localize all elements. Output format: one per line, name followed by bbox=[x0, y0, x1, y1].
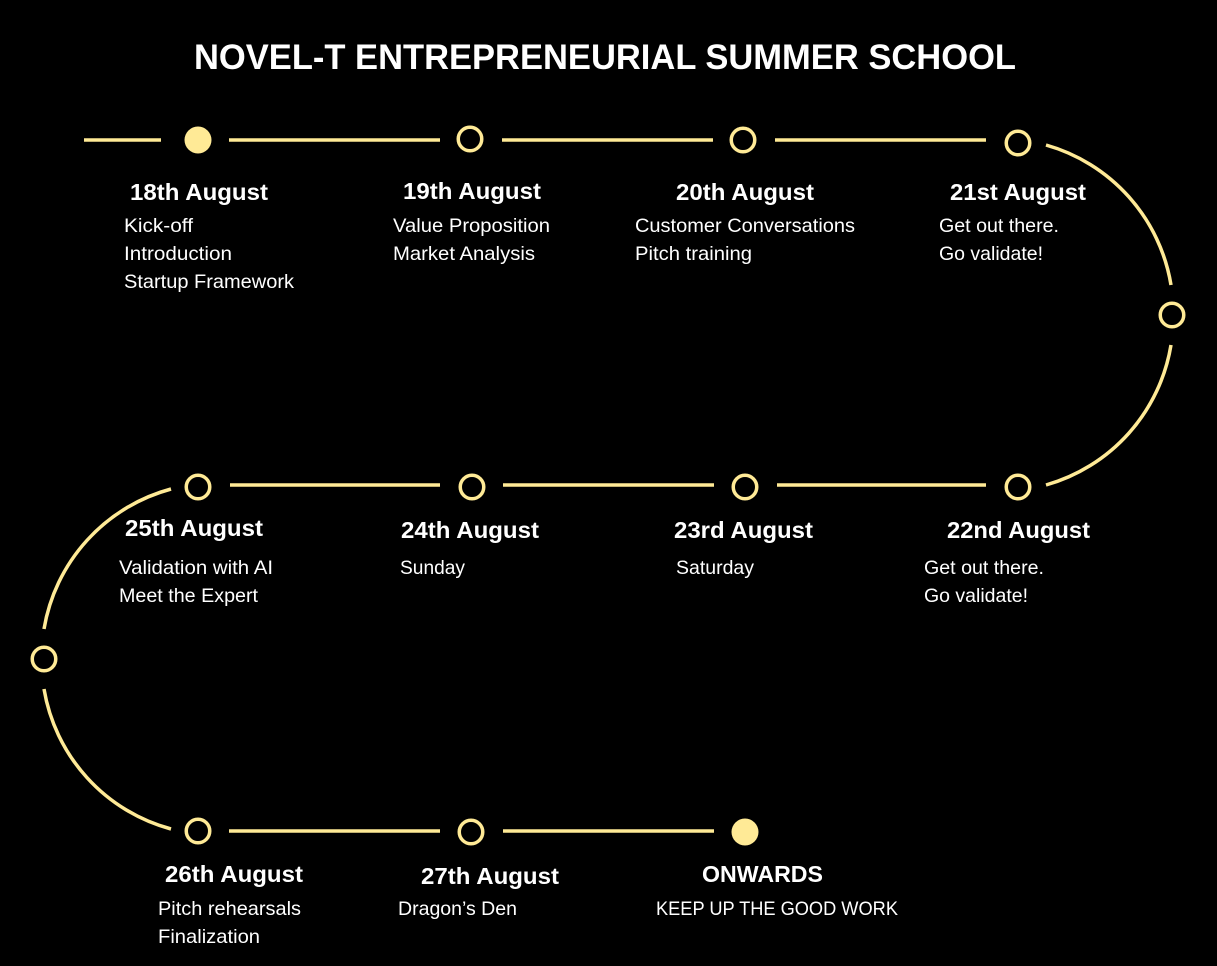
node: left curve bbox=[32, 647, 56, 671]
milestone: 25th August: 25th August bbox=[125, 515, 263, 541]
milestone: 20th August: 20th August bbox=[676, 179, 814, 205]
milestone: 18th August: Startup Framework bbox=[124, 271, 294, 293]
milestone: 27th August: Dragon’s Den bbox=[398, 898, 517, 920]
title: NOVEL-T ENTREPRENEURIAL SUMMER SCHOOL bbox=[194, 38, 1016, 77]
milestone: 19th August: Market Analysis bbox=[393, 243, 535, 265]
milestone: 24th August bbox=[400, 475, 539, 579]
milestone: 22nd August: Get out there. bbox=[924, 557, 1044, 579]
milestone: onwards: ONWARDS bbox=[702, 861, 823, 887]
milestone: 22nd August bbox=[924, 475, 1090, 607]
milestone: 19th August: 19th August bbox=[403, 178, 541, 204]
milestone: 27th August bbox=[398, 820, 559, 920]
milestone: 18th August: Introduction bbox=[124, 243, 232, 265]
milestone: 26th August: Finalization bbox=[158, 926, 260, 948]
milestone: 22nd August: 22nd August bbox=[947, 517, 1090, 543]
milestone: 20th August bbox=[635, 128, 855, 265]
milestone: 20th August: Customer Conversations bbox=[635, 215, 855, 237]
milestone: onwards bbox=[656, 818, 898, 920]
milestone: 22nd August: Go validate! bbox=[924, 585, 1028, 607]
node: right curve bbox=[1160, 303, 1184, 327]
milestone: 23rd August: Saturday bbox=[676, 557, 754, 579]
milestone: 21st August: Get out there. bbox=[939, 215, 1059, 237]
milestone: 24th August: 24th August bbox=[401, 517, 539, 543]
milestone: 20th August: Pitch training bbox=[635, 243, 752, 265]
milestone: 21st August: 21st August bbox=[950, 179, 1086, 205]
milestone: 26th August: Pitch rehearsals bbox=[158, 898, 301, 920]
milestone: 24th August: Sunday bbox=[400, 557, 465, 579]
milestone: 26th August: 26th August bbox=[165, 861, 303, 887]
milestone: 25th August bbox=[119, 475, 273, 607]
milestone: 25th August: Validation with AI bbox=[119, 557, 273, 579]
milestone: 27th August: 27th August bbox=[421, 863, 559, 889]
milestone: 18th August: Kick-off bbox=[124, 215, 194, 237]
milestone: 23rd August bbox=[674, 475, 813, 579]
milestone: 18th August bbox=[124, 126, 294, 293]
milestone: 19th August: Value Proposition bbox=[393, 215, 550, 237]
milestone: 26th August bbox=[158, 819, 303, 948]
milestone: onwards: KEEP UP THE GOOD WORK bbox=[656, 898, 898, 920]
milestone: 18th August: 18th August bbox=[130, 179, 268, 205]
milestone: 23rd August: 23rd August bbox=[674, 517, 813, 543]
milestone: 19th August bbox=[393, 127, 550, 265]
milestone: 21st August bbox=[939, 131, 1086, 265]
milestone: 25th August: Meet the Expert bbox=[119, 585, 259, 607]
timeline path bbox=[44, 140, 1171, 831]
milestone: 21st August: Go validate! bbox=[939, 243, 1043, 265]
